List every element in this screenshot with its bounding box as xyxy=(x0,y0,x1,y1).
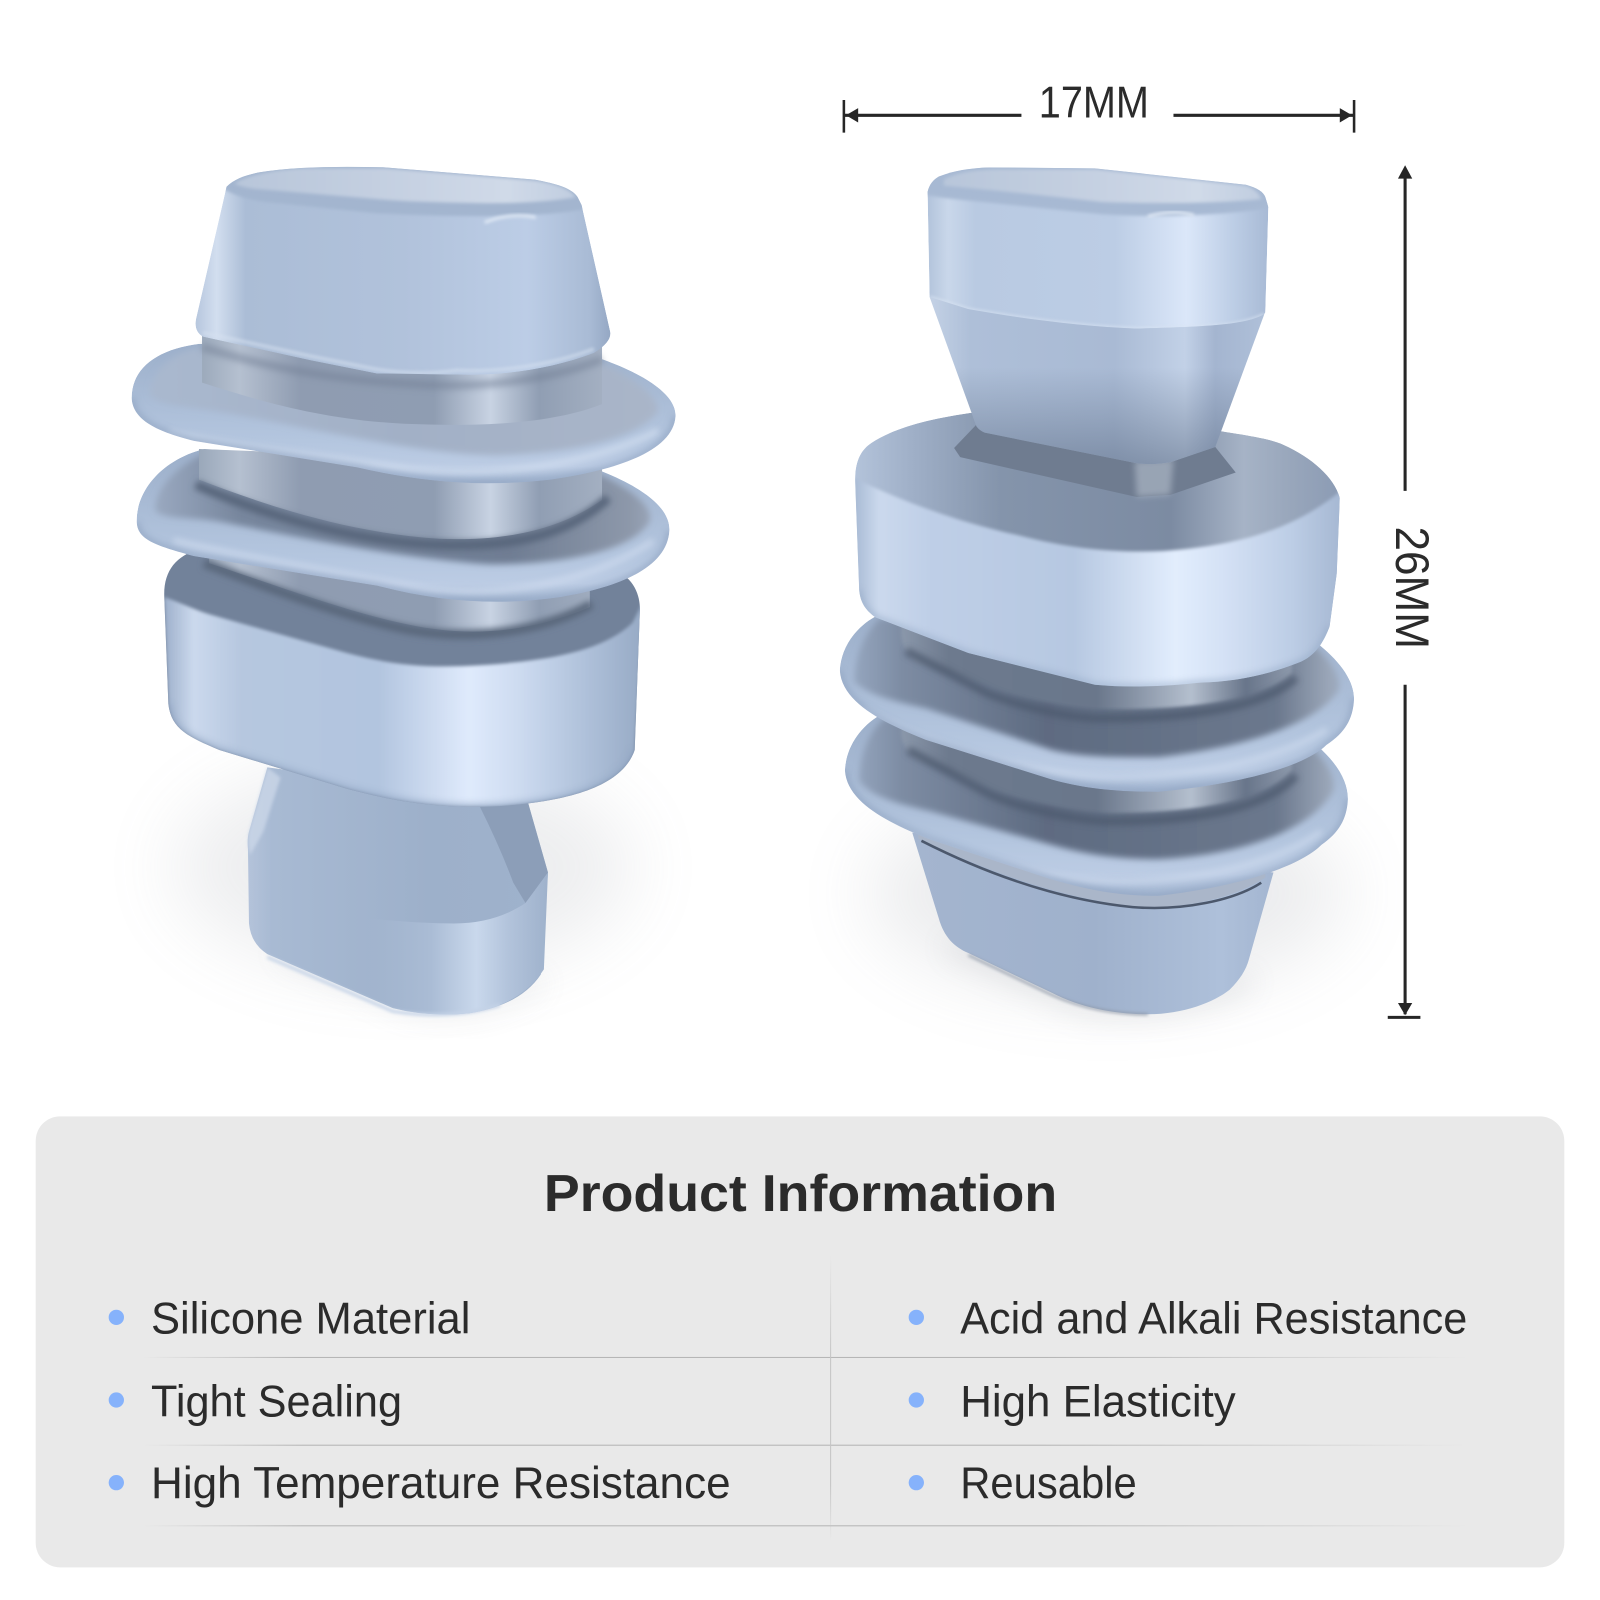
left plug lower ring xyxy=(137,449,669,602)
panel heading: Product Information xyxy=(544,1165,1057,1223)
right plug cap xyxy=(918,163,1276,329)
product: left silicone plug xyxy=(132,163,676,1015)
right plug dark recess base xyxy=(954,424,1236,497)
dimension: 26MM height: 26MM xyxy=(1386,527,1438,649)
right plug neck A xyxy=(901,618,1296,718)
right plug funnel xyxy=(930,297,1264,464)
dimension: 17MM width: 17MM xyxy=(1039,76,1149,127)
right plug wide band xyxy=(849,412,1347,694)
product: right silicone plug xyxy=(840,163,1354,1014)
left plug neck three xyxy=(204,551,592,634)
right plug upper ring xyxy=(840,616,1354,792)
right plug neck B xyxy=(901,719,1296,821)
left plug wide band xyxy=(164,549,643,807)
feature: High Elasticity: High Elasticity xyxy=(960,1375,1236,1426)
feature: High Temperature Resistance: High Temperature Resistance xyxy=(151,1457,731,1508)
feature: Acid and Alkali Resistance: Acid and Alkali Resistance xyxy=(960,1293,1467,1344)
feature: Silicone Material: Silicone Material xyxy=(151,1293,470,1344)
panel: product information xyxy=(36,1116,1564,1567)
right plug lower stem xyxy=(912,832,1273,1014)
left plug ground shadow xyxy=(173,760,633,1008)
left plug neck one xyxy=(202,332,602,425)
left plug neck two xyxy=(196,449,608,545)
right plug lower ring xyxy=(845,715,1348,896)
dimension: 17MM width xyxy=(844,76,1354,133)
panel background xyxy=(36,1116,1564,1567)
right plug ground shadow xyxy=(867,791,1347,1009)
feature: Reusable: Reusable xyxy=(960,1457,1137,1508)
left plug cap xyxy=(196,163,610,375)
left plug upper ring xyxy=(132,344,676,483)
feature: Tight Sealing: Tight Sealing xyxy=(151,1375,402,1426)
dimension: 26MM height xyxy=(1386,165,1438,1017)
left plug lower stem xyxy=(248,767,548,1015)
